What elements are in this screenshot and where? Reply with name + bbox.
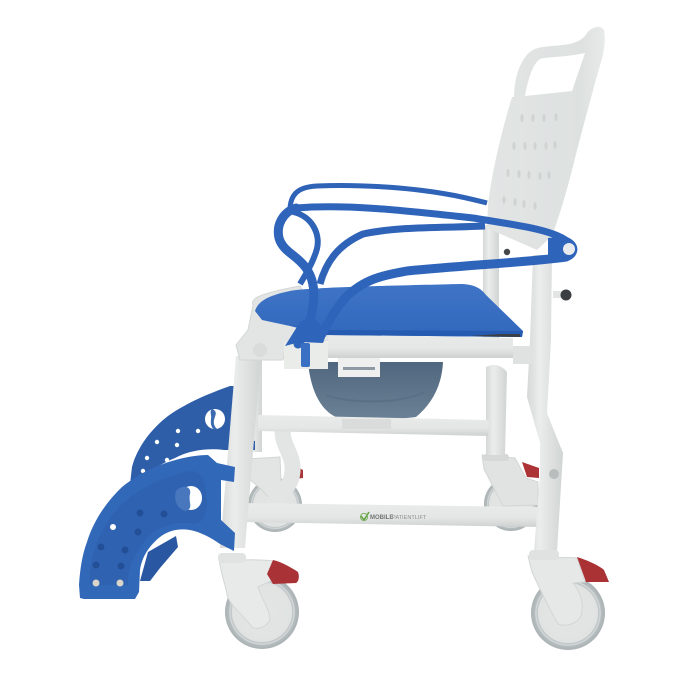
far armrest [290,185,487,284]
upper crossbar [258,415,489,436]
backrest with handle [487,27,605,250]
brand logo on crossbar: MOBILE [370,515,393,521]
curved inner support [274,428,293,505]
commode bucket [308,362,443,419]
bucket handle tag [338,358,380,377]
front main leg [220,356,261,548]
seat frame [236,286,533,377]
armrest base and clip [285,316,327,367]
underside of near footrest [140,536,178,581]
rear main leg [527,255,563,552]
lower crossbar [240,503,541,527]
adjustment knobs [504,249,572,300]
sticker on crossbar [342,419,391,429]
rear caster [528,550,609,650]
rear casters behind the frame [245,454,539,532]
front inner post [247,358,262,452]
rear upper inner post [483,225,499,345]
rear inner post [486,365,507,455]
near armrest with loop [278,207,572,344]
brand logo on crossbar: PATIENTLIFT [392,515,427,521]
front caster [218,553,299,649]
armrest pivot cap [548,236,577,263]
near footrest [79,455,235,599]
brand logo on crossbar [360,512,427,521]
seat cushion [255,284,523,337]
far footrest [130,386,255,484]
